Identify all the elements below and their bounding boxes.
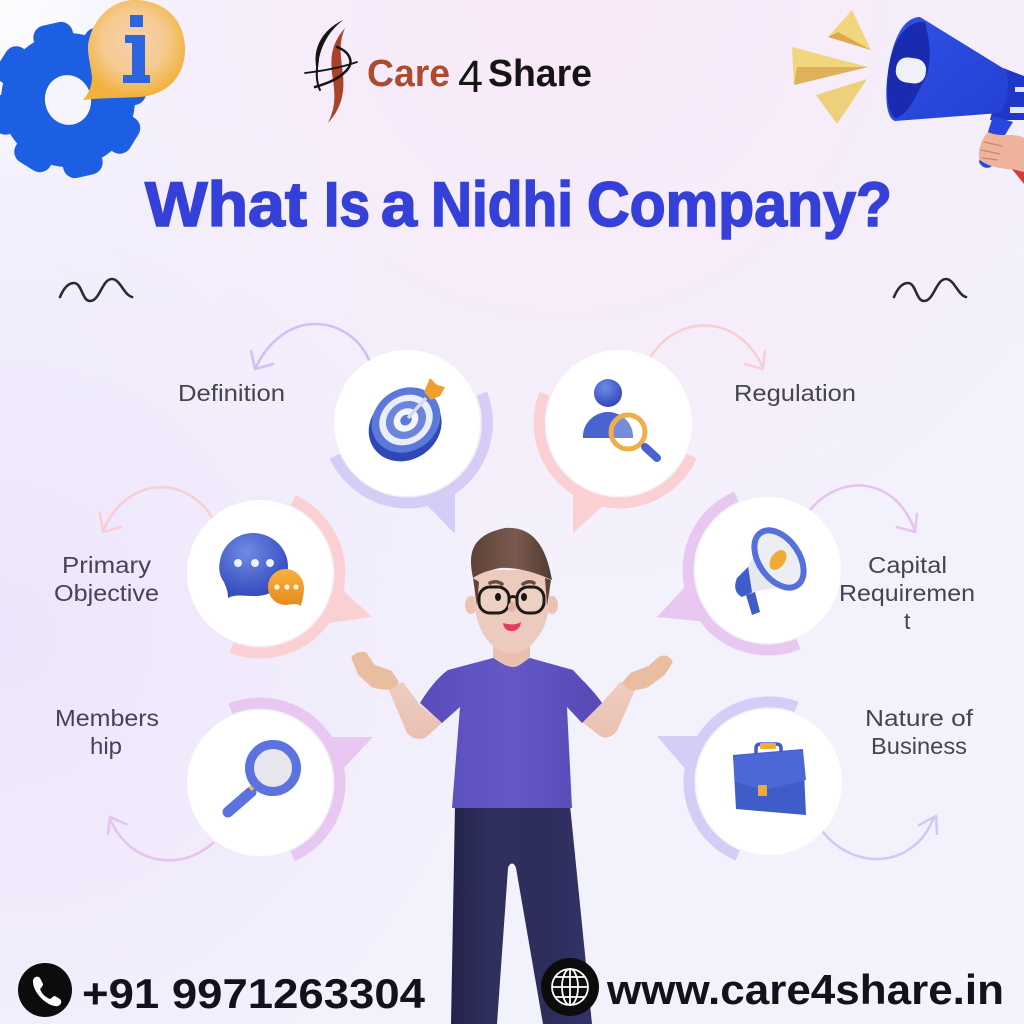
neck [493, 640, 530, 670]
label: Nature of Business: Business [871, 733, 967, 759]
footer: phone [18, 963, 426, 1017]
label: Capital Requirement: Capital [868, 552, 947, 578]
speech ring [231, 500, 372, 653]
right arm [582, 682, 636, 738]
speech ring [657, 496, 798, 650]
icon: magnifying glass [187, 710, 333, 856]
right hand [625, 658, 670, 688]
website url: www.care4share.in [606, 966, 1004, 1013]
speech ring [335, 394, 487, 534]
panel: Capital Requirement [657, 486, 975, 650]
label: Capital Requirement: Requiremen [839, 580, 975, 606]
icon: gear with info bubble [0, 0, 185, 194]
mouth [503, 622, 521, 631]
icon: megaphone held by hand [886, 17, 1024, 184]
pants [451, 805, 592, 1024]
footer: website [541, 958, 1004, 1016]
speech ring [230, 703, 373, 856]
logo mark [305, 20, 357, 123]
icon: gold burst triangles [792, 10, 871, 124]
label: Membership [55, 705, 159, 759]
label: Capital Requirement: t [904, 608, 911, 634]
eyes [495, 593, 527, 601]
label: Nature of Business [865, 705, 974, 759]
arrow: nature of business [823, 816, 937, 859]
title: a [381, 170, 418, 240]
title: Is [324, 170, 370, 240]
label: Regulation: Regulation [734, 380, 856, 406]
squiggle left [60, 279, 132, 301]
label: Primary Objective: Objective [54, 580, 159, 606]
label: Definition: Definition [178, 380, 285, 406]
eyebrows [490, 582, 534, 584]
icon: globe [541, 958, 599, 1016]
icon: person with magnifier [546, 350, 692, 496]
panel: Primary Objective [54, 487, 372, 653]
squiggle right [894, 279, 966, 301]
panel: Definition [178, 324, 487, 534]
logo text: Care [367, 53, 450, 95]
label: Membership: Members [55, 705, 159, 731]
icon: briefcase [696, 709, 842, 855]
title [145, 170, 892, 240]
left arm [388, 682, 442, 739]
speech ring [539, 394, 692, 533]
character: man shrugging [354, 528, 670, 1024]
arrow: primary objective [100, 487, 213, 532]
icon: megaphone [695, 497, 841, 643]
title: Nidhi [431, 170, 573, 240]
panel: Regulation [539, 325, 856, 533]
nose [508, 602, 516, 612]
face [474, 570, 550, 653]
logo: Care 4 Share: 4 [458, 51, 483, 102]
icon: target with dart [334, 350, 480, 496]
arrow: regulation [651, 325, 765, 369]
title: Company? [587, 170, 892, 240]
icon: info speech bubble [83, 0, 185, 100]
panel: Nature of Business [657, 702, 974, 859]
label: Primary Objective: Primary [62, 552, 152, 578]
shirt [420, 658, 602, 808]
icon: phone [18, 963, 72, 1017]
label: Primary Objective [54, 552, 159, 606]
arrow: membership [108, 817, 213, 860]
speech ring [657, 702, 797, 856]
logo: Care 4 Share [305, 20, 592, 123]
title: What [145, 170, 307, 240]
icon: blue gear [0, 6, 162, 194]
ears [465, 596, 558, 614]
left hand [354, 654, 396, 687]
panel: Membership [55, 703, 373, 860]
glasses [479, 587, 544, 613]
icon: chat bubbles [187, 500, 333, 646]
phone number: +91 9971263304 [82, 970, 426, 1017]
arrow: definition [251, 324, 369, 369]
arrow: capital requirement [810, 486, 917, 532]
label: Membership: hip [90, 733, 122, 759]
logo: Care 4 Share: Share [488, 53, 592, 95]
sideburns [473, 578, 551, 606]
label: Capital Requirement [839, 552, 975, 634]
hair [471, 528, 552, 580]
label: Nature of Business: Nature of [865, 705, 974, 731]
